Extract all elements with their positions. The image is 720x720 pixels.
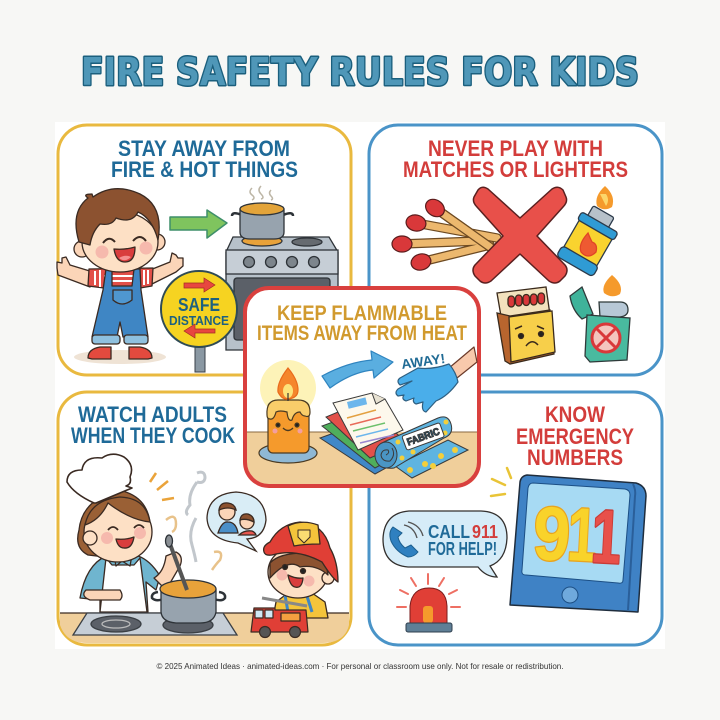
- callout: call 911: 911: [472, 522, 498, 542]
- icon: fabric roll: [375, 417, 468, 478]
- icon: tablet with 911: 1: [589, 494, 624, 581]
- icon: papers: [320, 393, 410, 474]
- icon: sparks: [491, 468, 511, 496]
- table: [245, 432, 479, 486]
- heading: keep flammable: [257, 301, 467, 345]
- heading: keep flammable: ITEMS AWAY FROM HEAT: [257, 321, 467, 345]
- heading: emergency numbers: NUMBERS: [527, 445, 623, 470]
- icon: candle: [259, 360, 317, 463]
- heading: never play: MATCHES OR LIGHTERS: [403, 157, 628, 182]
- icon: fabric roll: FABRIC: [406, 426, 441, 448]
- title: FIRE SAFETY RULES FOR KIDS: [81, 51, 639, 95]
- icon: phone: [390, 527, 418, 557]
- heading: watch adults: WATCH ADULTS: [78, 402, 227, 427]
- icon: toy fire truck: [251, 598, 308, 638]
- heading: stay away: FIRE & HOT THINGS: [111, 157, 298, 182]
- heading: never play: NEVER PLAY WITH: [428, 136, 603, 161]
- callout: call 911: CALL: [428, 522, 470, 542]
- panel: stay away from fire: [57, 125, 351, 375]
- icon: boy with helmet and truck: [264, 522, 338, 618]
- icon: tablet with 911: [510, 475, 646, 612]
- panel: emergency numbers: [369, 392, 662, 645]
- icon: red cross: [473, 187, 567, 283]
- label: away: AWAY!: [400, 351, 446, 372]
- icon: safe distance sign: SAFE: [178, 295, 220, 315]
- callout: call 911: FOR HELP!: [428, 539, 497, 559]
- panel: never play with matches: [369, 125, 662, 375]
- heading: stay away: STAY AWAY FROM: [118, 136, 290, 161]
- icon: tablet with 911: 1: [565, 492, 600, 579]
- icon: cooking pot: [152, 535, 225, 623]
- icon: matches: [392, 196, 497, 272]
- heading: emergency numbers: EMERGENCY: [516, 424, 634, 449]
- footer: © 2025 Animated Ideas · animated-ideas.com · For personal or classroom use only. Not for resale or redistribution.: [156, 661, 564, 671]
- heading: keep flammable: KEEP FLAMMABLE: [277, 301, 447, 325]
- icon: safe distance sign: DISTANCE: [169, 313, 229, 328]
- icon: happy boy: [57, 189, 183, 364]
- heading: watch adults: [71, 402, 235, 448]
- heading: never play: [403, 136, 628, 182]
- icon: green lighter: [570, 275, 630, 362]
- panel: watch adults: [58, 392, 351, 645]
- callout: call 911: [383, 511, 507, 577]
- icon: safe distance sign: [161, 271, 237, 372]
- icon: tablet with 911: 9: [531, 491, 573, 578]
- heading: emergency numbers: KNOW: [545, 402, 605, 427]
- heading: watch adults: WHEN THEY COOK: [71, 423, 235, 448]
- arrow: blue curved: [322, 351, 393, 388]
- heading: stay away: [111, 136, 298, 182]
- panel: keep flammable items away: [245, 288, 479, 486]
- icon: sad matchbox: [497, 287, 555, 364]
- arrow: green: [170, 210, 227, 238]
- icon: yellow lighter: [556, 186, 624, 277]
- icon: siren: [397, 574, 460, 632]
- icon: stove with pot: [226, 203, 338, 350]
- icon: gloved hand: [396, 347, 477, 412]
- icon: mother cooking: [67, 454, 181, 612]
- icon: stove: [73, 613, 237, 635]
- counter: [60, 613, 349, 643]
- icon: steam: [250, 186, 272, 200]
- icon: steam and sparks: [150, 472, 221, 570]
- icon: thought bubble: [207, 492, 266, 551]
- heading: emergency numbers: [516, 402, 634, 470]
